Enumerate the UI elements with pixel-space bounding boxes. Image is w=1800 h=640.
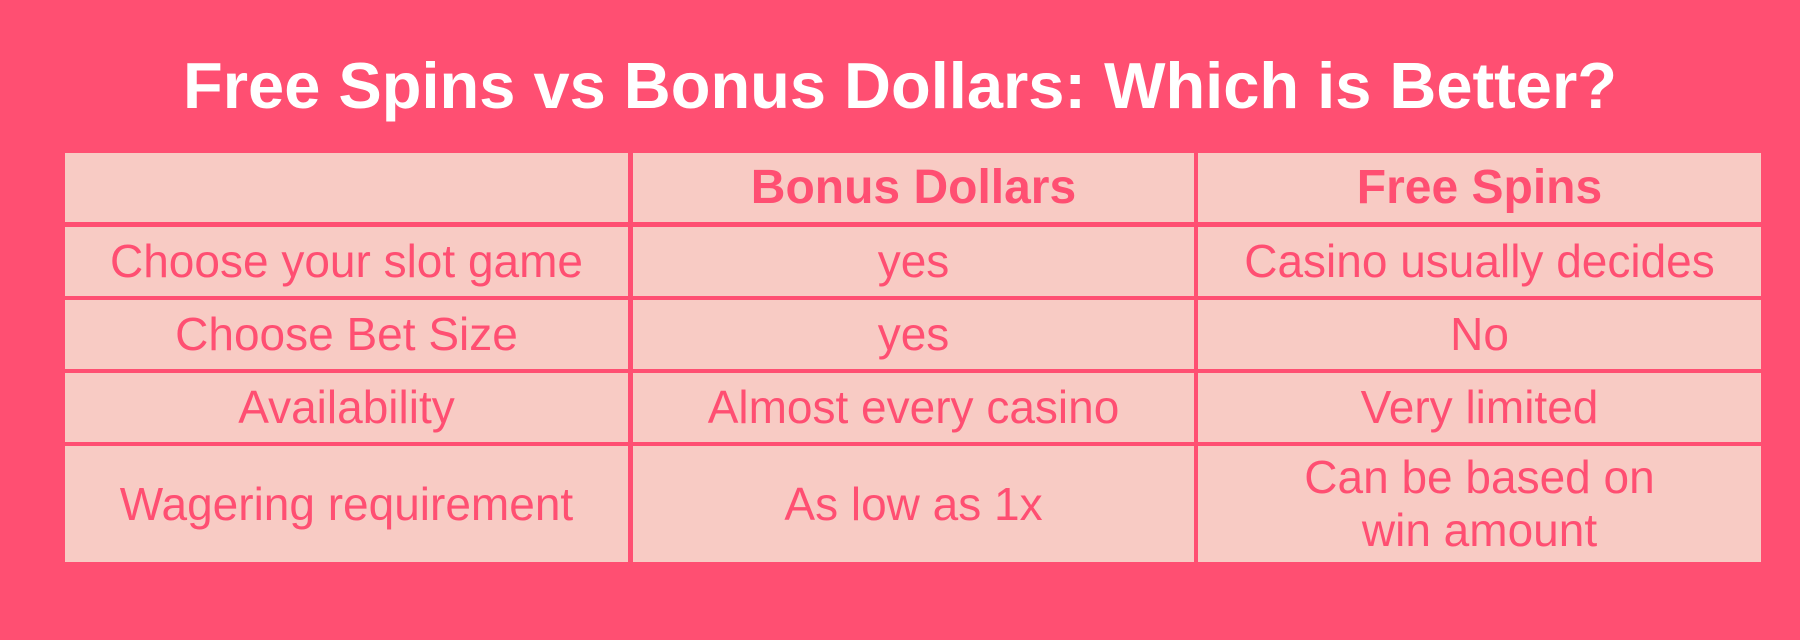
table: Can be based on xyxy=(1304,451,1655,503)
table: Bonus Dollars xyxy=(751,161,1076,214)
table: Wagering requirement xyxy=(120,478,573,530)
row: wagering xyxy=(65,446,1761,562)
row: availability xyxy=(65,373,1761,442)
table: Free Spins xyxy=(1357,161,1602,214)
table: win amount xyxy=(1362,504,1597,556)
table: No xyxy=(1450,308,1509,360)
table: Availability xyxy=(238,381,455,433)
table: As low as 1x xyxy=(784,478,1043,530)
table: yes xyxy=(878,308,949,360)
table: Choose Bet Size xyxy=(175,308,518,360)
header row xyxy=(65,153,1761,222)
row: bet size xyxy=(65,300,1761,369)
table: yes xyxy=(878,235,949,287)
row: choose slot xyxy=(65,227,1761,296)
table: Choose your slot game xyxy=(110,235,583,287)
table: Casino usually decides xyxy=(1244,235,1715,287)
table: Very limited xyxy=(1361,381,1598,433)
title: Free Spins vs Bonus Dollars: Which is Better? xyxy=(183,49,1617,122)
table: Almost every casino xyxy=(708,381,1119,433)
